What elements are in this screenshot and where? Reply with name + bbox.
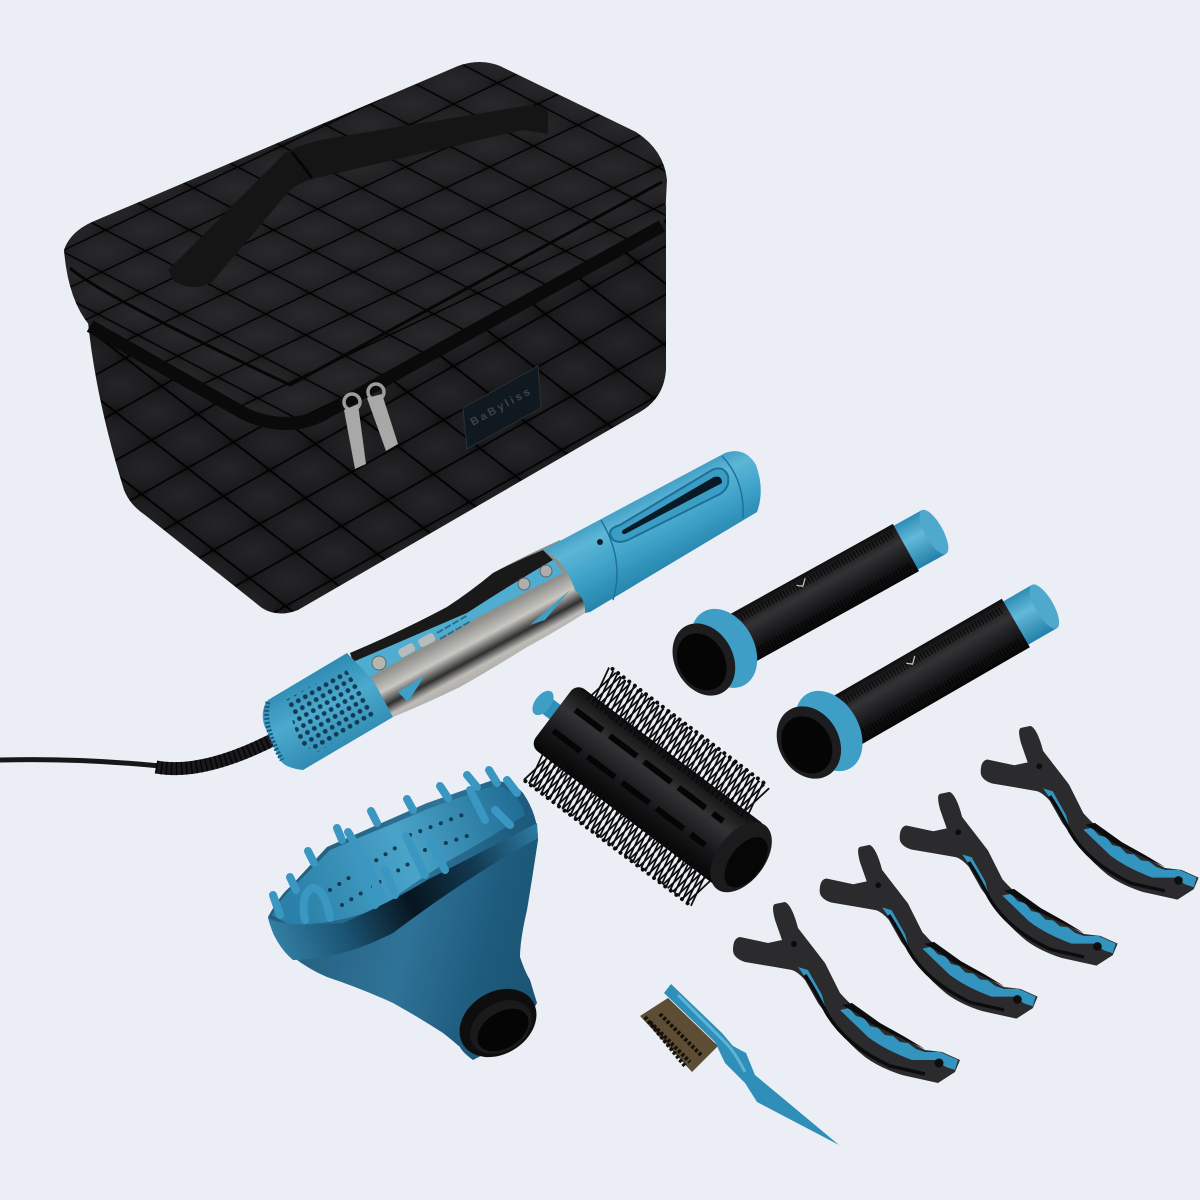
handle xyxy=(664,984,839,1145)
styling barrel 2 xyxy=(761,565,1074,795)
bristles xyxy=(640,998,718,1072)
brand name: BaByliss xyxy=(469,386,532,429)
styling barrel 1 xyxy=(658,491,962,710)
barrel seams xyxy=(601,456,743,600)
zipper xyxy=(90,226,662,424)
lower bristles xyxy=(525,764,703,906)
brush body xyxy=(530,683,768,890)
collar ring xyxy=(677,597,771,700)
upper bristles xyxy=(600,669,769,803)
hair styler wand xyxy=(263,451,761,770)
sensor dot xyxy=(597,539,603,545)
logo mark xyxy=(796,578,808,589)
rim band xyxy=(268,823,538,960)
zipper pull right xyxy=(367,384,398,451)
inner dish xyxy=(272,785,525,925)
diffuser fingers xyxy=(273,770,517,920)
end cap xyxy=(1001,580,1065,646)
end cap xyxy=(892,506,954,570)
diffuser xyxy=(268,770,549,1071)
cleaning brush xyxy=(640,984,839,1145)
brand patch xyxy=(463,366,541,449)
opening xyxy=(660,612,748,707)
black strip xyxy=(350,550,553,662)
vent holes xyxy=(330,812,470,905)
brush end xyxy=(698,811,784,904)
blue highlights in grip xyxy=(398,590,570,702)
black collar xyxy=(447,975,549,1071)
blue barrel xyxy=(543,451,761,613)
round brush xyxy=(493,643,804,927)
collar ring xyxy=(781,679,876,783)
zipper pull left xyxy=(344,394,366,469)
diffuser body xyxy=(268,780,538,1060)
logo mark xyxy=(905,656,918,667)
bag lid xyxy=(64,62,667,425)
cosmetic bag xyxy=(64,62,667,614)
buttons xyxy=(372,565,552,670)
hair clip 4 xyxy=(981,726,1199,900)
texture xyxy=(842,610,1021,734)
slots xyxy=(553,707,723,845)
lid seam xyxy=(70,182,662,385)
silver grip xyxy=(350,540,610,717)
black body xyxy=(707,524,919,674)
black body xyxy=(811,599,1030,757)
blue nub xyxy=(528,687,565,724)
power cord xyxy=(0,735,282,769)
hair clip 2 xyxy=(820,845,1038,1019)
vented base xyxy=(263,653,393,770)
texture xyxy=(738,534,911,652)
bag body xyxy=(88,205,666,614)
hair clip 3 xyxy=(900,792,1118,966)
hair clip 1 xyxy=(733,902,960,1083)
air slot xyxy=(610,468,728,542)
control strip xyxy=(353,560,563,677)
opening xyxy=(764,695,854,790)
bag handle xyxy=(168,106,548,287)
